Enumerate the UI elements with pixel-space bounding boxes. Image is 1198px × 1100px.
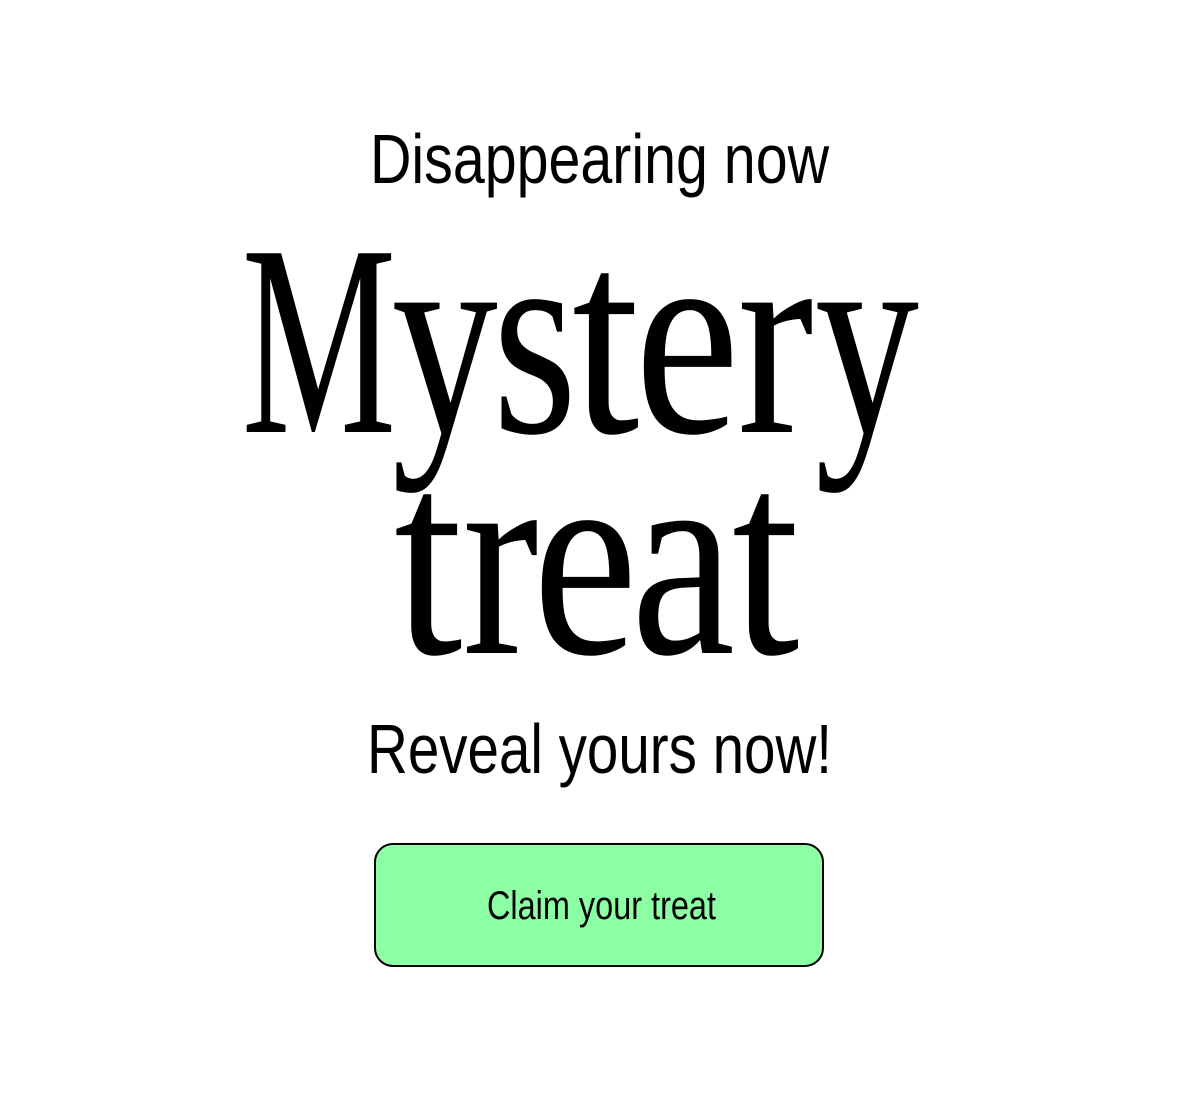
title: Mystery treat: e: [533, 402, 638, 714]
title: Mystery treat: t: [732, 402, 800, 714]
title: Mystery treat: [242, 181, 919, 714]
title: Mystery treat: y: [392, 181, 498, 494]
title: Mystery treat: y: [815, 181, 919, 494]
title: Mystery treat: r: [462, 402, 539, 714]
button: Claim your treat: [375, 844, 823, 966]
eyebrow text: Disappearing now: Disappearing now: [370, 120, 829, 198]
title: Mystery treat: M: [242, 190, 396, 492]
title: Mystery treat: e: [635, 181, 740, 493]
title: Mystery treat: t: [394, 402, 463, 714]
subheading: Reveal yours now!: Reveal yours now!: [367, 710, 832, 788]
title: Mystery treat: t: [572, 181, 640, 493]
title: Mystery treat: a: [631, 402, 735, 714]
title: Mystery treat: r: [737, 181, 814, 493]
button: Claim your treat: Claim your treat: [487, 884, 716, 928]
title: Mystery treat: s: [492, 181, 577, 493]
